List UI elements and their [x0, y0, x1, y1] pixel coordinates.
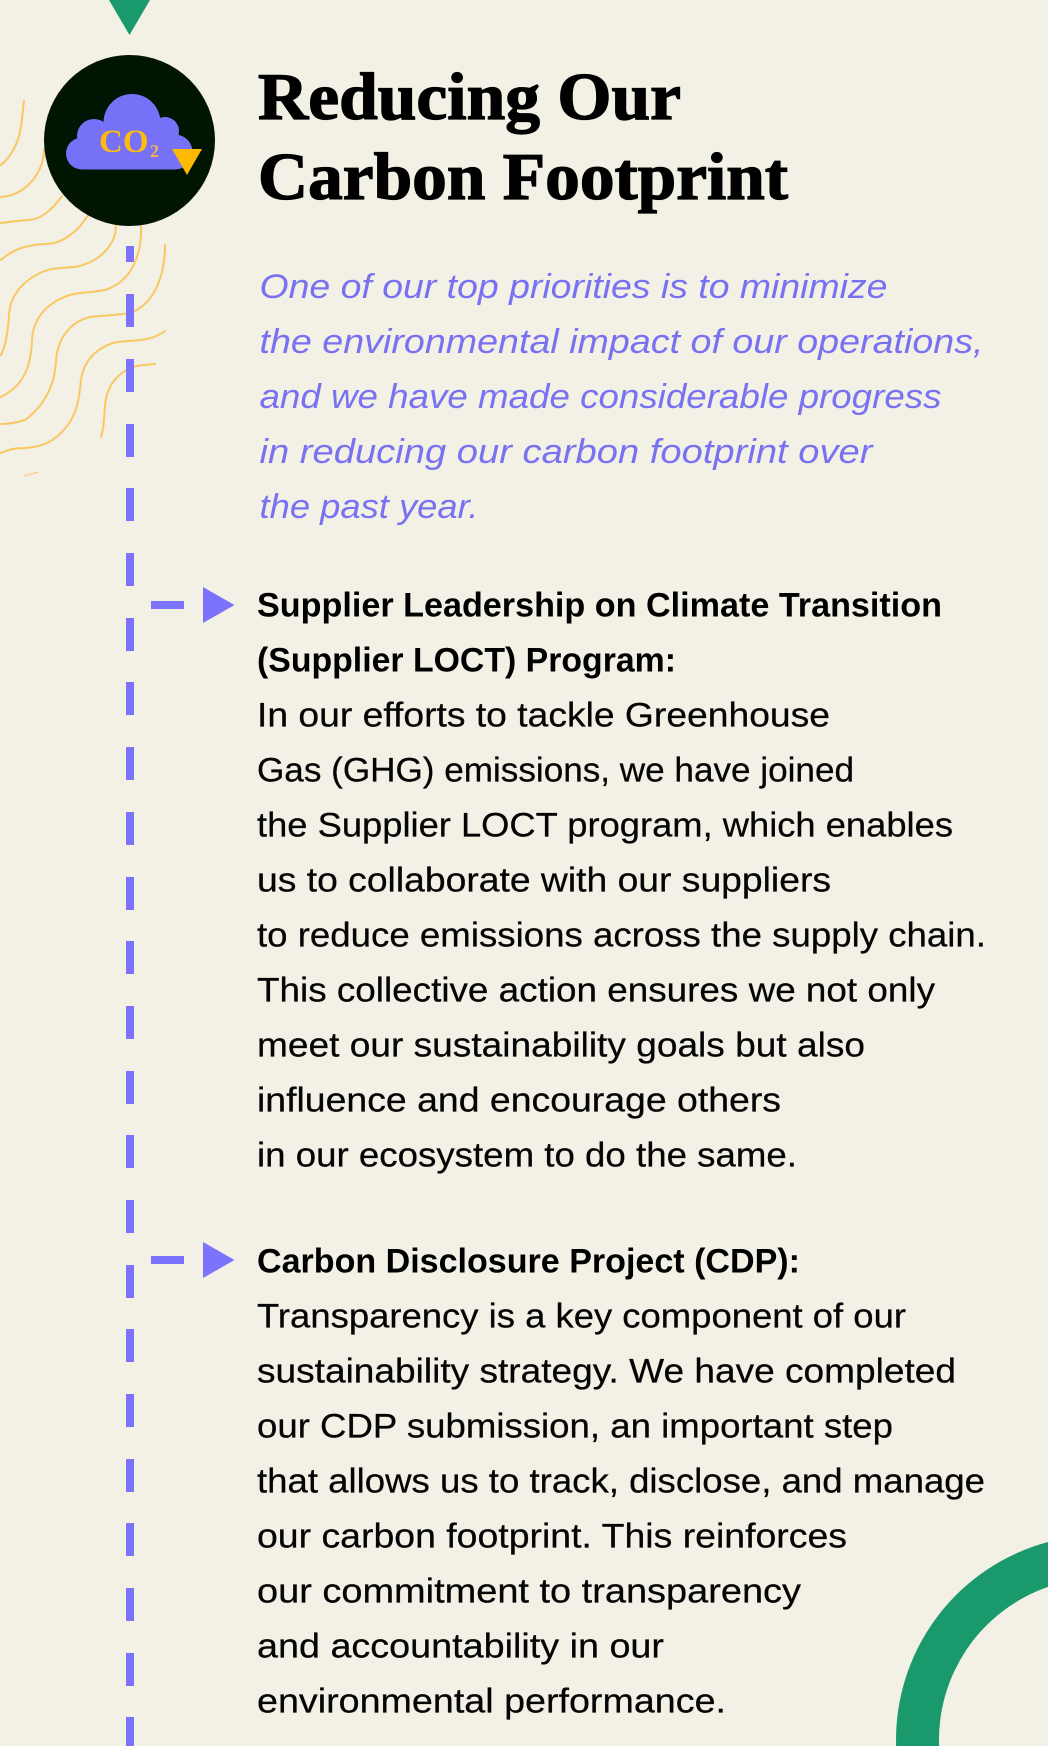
- intro paragraph: One of our top priorities is to minimize: [260, 268, 887, 306]
- body text: CDP: that allows us to track, disclose, and manage: [257, 1463, 985, 1501]
- icon: green arrowhead at top: [109, 0, 150, 35]
- arrow: bullet for Supplier LOCT: [151, 587, 234, 623]
- body text: CDP: our commitment to transparency: [257, 1573, 801, 1611]
- arrow: bullet for CDP: [151, 1242, 234, 1278]
- body text: CDP: our carbon footprint. This reinforces: [257, 1518, 847, 1556]
- body text: CDP: our CDP submission, an important step: [257, 1408, 893, 1446]
- body text: Supplier LOCT: to reduce emissions across the supply chain.: [257, 917, 986, 955]
- body text: CDP: and accountability in our: [257, 1628, 664, 1666]
- heading: CDP: Carbon Disclosure Project (CDP):: [257, 1242, 800, 1280]
- icon: CO2 cloud badge: [44, 55, 215, 226]
- icon: purple cloud: [66, 94, 192, 170]
- heading: Supplier LOCT: (Supplier LOCT) Program:: [257, 642, 676, 680]
- body text: Supplier LOCT: This collective action ensures we not only: [257, 972, 935, 1010]
- title: Carbon Footprint: [258, 140, 789, 214]
- intro paragraph: [260, 268, 984, 526]
- intro paragraph: and we have made considerable progress: [260, 378, 942, 416]
- section: Supplier LOCT program: [151, 586, 986, 1175]
- title: [258, 60, 789, 214]
- intro paragraph: in reducing our carbon footprint over: [260, 433, 874, 471]
- timeline: dashed purple vertical line: [126, 246, 134, 1746]
- body text: CDP: Transparency is a key component of our: [257, 1298, 906, 1336]
- CO2 label: 2: [150, 141, 159, 161]
- title: Reducing Our: [258, 60, 681, 134]
- body text: Supplier LOCT: In our efforts to tackle Greenhouse: [257, 697, 830, 735]
- body text: CDP: environmental performance.: [257, 1683, 726, 1721]
- heading: Supplier LOCT: [257, 586, 942, 680]
- section: Carbon Disclosure Project: [151, 1242, 985, 1721]
- heading: Supplier LOCT: Supplier Leadership on Climate Transition: [257, 586, 942, 624]
- body text: Supplier LOCT: Gas (GHG) emissions, we have joined: [257, 752, 854, 790]
- decorative green arc: [896, 1542, 1048, 1746]
- body text: Supplier LOCT: influence and encourage others: [257, 1082, 781, 1120]
- decorative yellow wave lines: [1, 101, 165, 476]
- body text: Supplier LOCT: in our ecosystem to do the same.: [257, 1137, 797, 1175]
- body text: Supplier LOCT: us to collaborate with our suppliers: [257, 862, 831, 900]
- intro paragraph: the past year.: [260, 488, 478, 526]
- body text: CDP: sustainability strategy. We have completed: [257, 1353, 956, 1391]
- body text: Supplier LOCT: the Supplier LOCT program, which enables: [257, 807, 953, 845]
- body text: Supplier LOCT: [257, 697, 986, 1175]
- icon: yellow down arrow: [172, 149, 202, 175]
- intro paragraph: the environmental impact of our operations,: [260, 323, 984, 361]
- CO2 label: CO: [99, 124, 148, 160]
- body text: Supplier LOCT: meet our sustainability goals but also: [257, 1027, 865, 1065]
- body text: CDP: [257, 1298, 985, 1721]
